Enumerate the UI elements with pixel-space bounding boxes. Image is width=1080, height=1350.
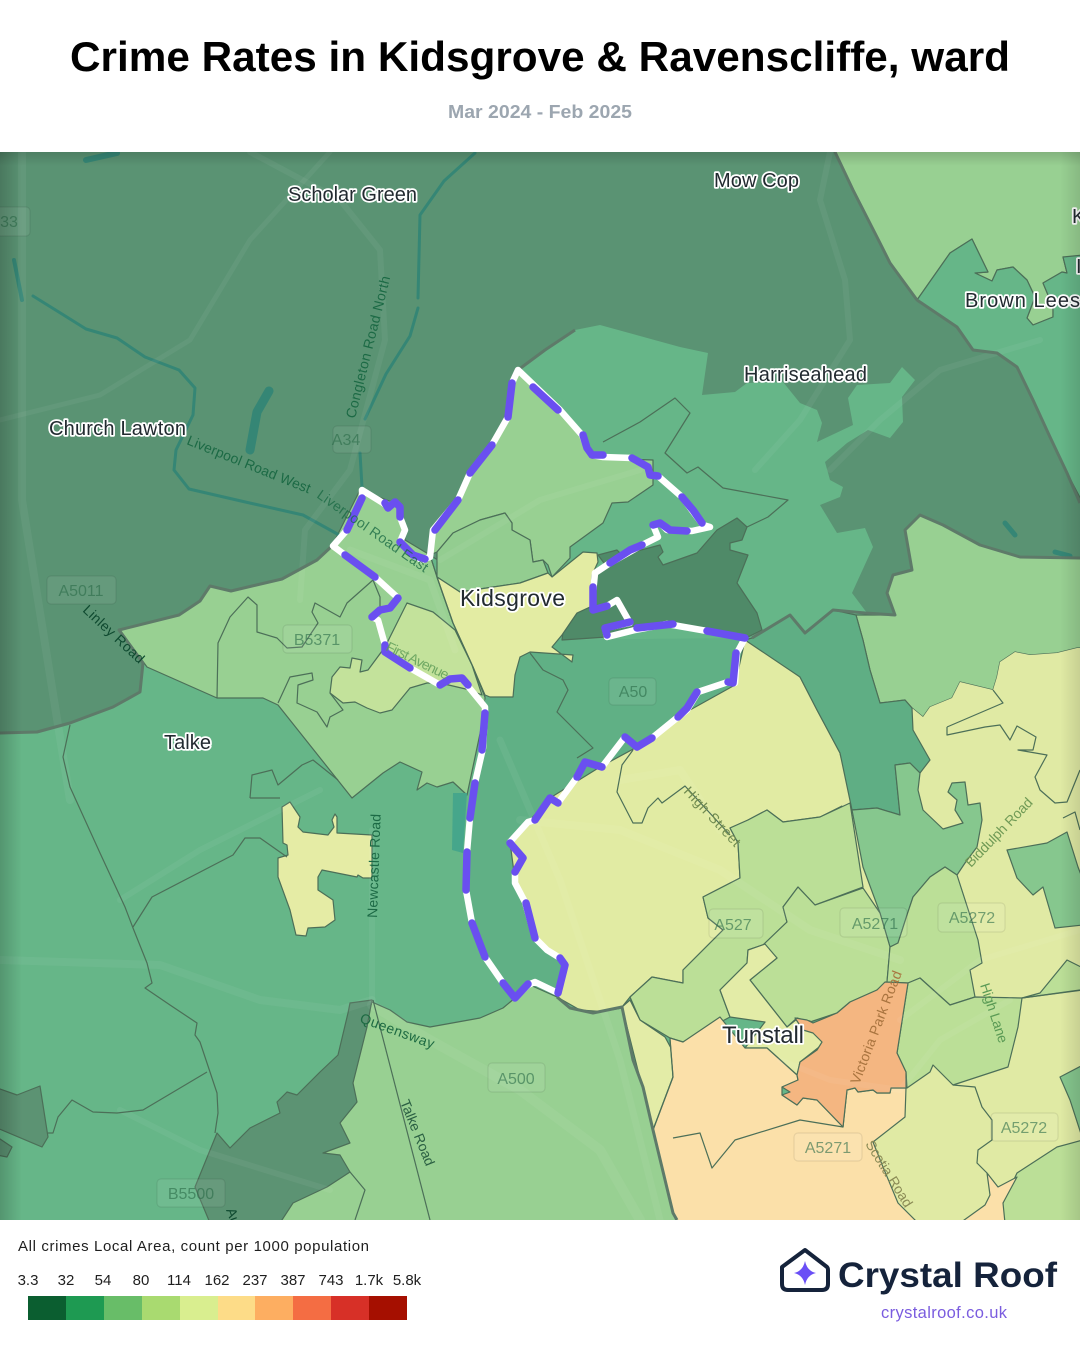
road number shields: A527: [714, 917, 752, 934]
road number shields: B5500: [168, 1186, 214, 1203]
road name labels: Queensway: [358, 1010, 437, 1051]
legend: colour scale: 114: [167, 1272, 191, 1289]
place names: Talke: [164, 732, 211, 754]
road name labels: High Lane: [977, 981, 1012, 1045]
road name labels: Liverpool Road West: [185, 432, 313, 496]
legend: colour scale: 387: [280, 1272, 306, 1289]
road number shields: A50: [619, 684, 647, 701]
road name labels: [80, 274, 1036, 1227]
legend: colour scale: 162: [204, 1272, 230, 1289]
road name labels: First Avenue: [384, 638, 452, 683]
logo: Crystal Roof: [780, 1248, 1058, 1322]
road name labels: Scotia Road: [862, 1137, 916, 1210]
icon: house with star: [782, 1250, 828, 1290]
place names: Mow Cop: [714, 170, 799, 192]
place names: Scholar Green: [288, 184, 417, 206]
road name labels: Talke Road: [397, 1097, 438, 1168]
map choropleth regions: [0, 149, 1080, 1223]
logo: Crystal Roof: crystalroof.co.uk: [881, 1304, 1008, 1322]
subtitle: date range: Mar 2024 - Feb 2025: [448, 102, 632, 122]
legend: colour scale: 54: [95, 1272, 111, 1289]
road number shields: A5272: [1001, 1120, 1047, 1137]
title: Crime Rates in Kidsgrove & Ravenscliffe, ward: [70, 33, 1010, 80]
road name labels: Congleton Road North: [342, 274, 393, 420]
legend: colour scale: 5.8k: [393, 1272, 422, 1289]
road name labels: High Street: [681, 783, 744, 850]
road number shields: A5271: [852, 916, 898, 933]
road number shields: A5272: [949, 910, 995, 927]
road name labels: Liverpool Road East: [314, 486, 432, 575]
choropleth map: [0, 152, 1080, 1220]
road number shields: A5011: [58, 583, 104, 600]
place names: Kidsgrove: [460, 585, 565, 611]
legend: colour scale: 32: [58, 1272, 74, 1289]
road number shields: A34: [332, 432, 360, 449]
legend: colour scale: 237: [242, 1272, 268, 1289]
road name labels: Newcastle Road: [364, 814, 384, 918]
legend: colour scale: 80: [133, 1272, 149, 1289]
place names: Harriseahead: [744, 364, 867, 386]
road number shields: B5371: [294, 632, 340, 649]
ward boundary: Kidsgrove & Ravenscliffe: [333, 370, 745, 998]
road name labels: Linley Road: [80, 601, 148, 666]
legend: colour scale: 1.7k: [355, 1272, 384, 1289]
legend: colour scale: 743: [318, 1272, 344, 1289]
place names: Church Lawton: [49, 418, 186, 440]
place names: [49, 170, 1080, 1049]
road number shields: 33: [0, 214, 18, 231]
legend title: All crimes Local Area, count per 1000 population: [18, 1238, 369, 1255]
road number shields: A500: [497, 1071, 535, 1088]
road name labels: Biddulph Road: [962, 794, 1036, 870]
road number shields: [0, 207, 1058, 1207]
legend: colour scale: [18, 1272, 422, 1320]
place names: Tunstall: [722, 1022, 804, 1049]
road number shields: A5271: [805, 1140, 851, 1157]
logo: Crystal Roof: Crystal Roof: [838, 1256, 1057, 1295]
legend: colour scale: 3.3: [18, 1272, 38, 1289]
road name labels: Victoria Park Road: [847, 968, 905, 1086]
place names: Brown Lees: [965, 290, 1080, 312]
